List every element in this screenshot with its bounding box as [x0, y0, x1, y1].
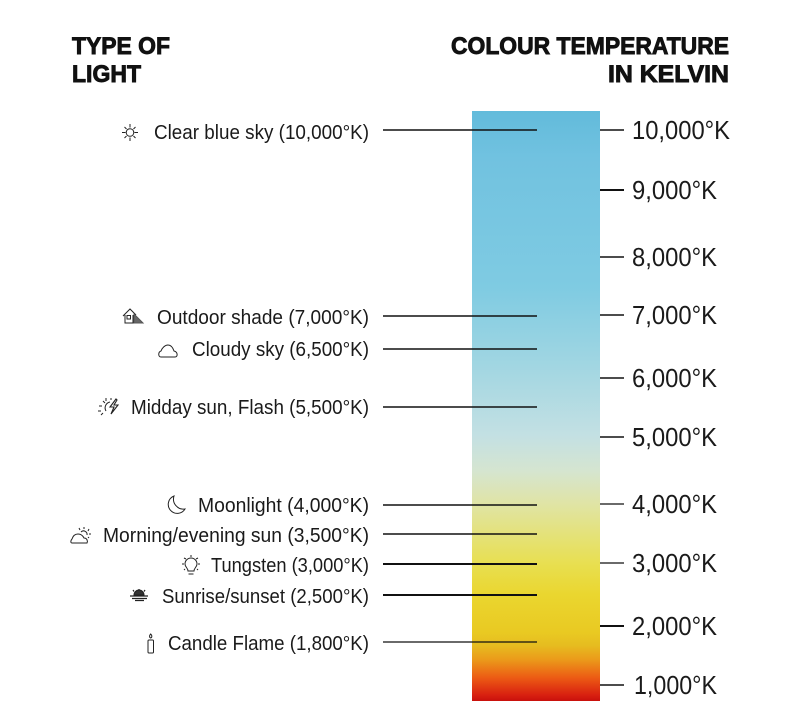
colour temperature gradient bar — [472, 111, 600, 701]
icon: crescent moon — [168, 496, 185, 513]
icon: sun on horizon — [130, 589, 148, 600]
light type: cloudy sky — [159, 339, 537, 361]
light type: candle flame: Candle Flame (1,800°K) — [168, 633, 369, 655]
icon: sun — [122, 124, 138, 141]
icon: light bulb — [182, 555, 200, 574]
scale mark: 8,000K — [600, 244, 717, 272]
icon: cloud — [159, 345, 177, 357]
scale mark: 9,000K: 9,000°K — [632, 177, 717, 205]
icon: house in shade — [123, 309, 143, 323]
kelvin scale — [600, 117, 730, 700]
light type: tungsten — [182, 555, 537, 577]
light type: cloudy sky: Cloudy sky (6,500°K) — [192, 339, 369, 361]
scale mark: 2,000K — [600, 613, 717, 641]
light type: sunrise/sunset: Sunrise/sunset (2,500°K) — [162, 586, 369, 608]
heading: type of light: TYPE OF — [72, 33, 170, 60]
scale mark: 9,000K — [600, 177, 717, 205]
scale mark: 8,000K: 8,000°K — [632, 244, 717, 272]
light type: outdoor shade — [123, 307, 537, 329]
heading: colour temperature in kelvin — [451, 33, 729, 88]
heading: type of light — [72, 33, 170, 88]
scale mark: 3,000K — [600, 550, 717, 578]
light type: tungsten: Tungsten (3,000°K) — [211, 555, 369, 577]
scale mark: 6,000K — [600, 365, 717, 393]
icon: sun behind cloud — [71, 527, 91, 543]
icon: candle — [148, 634, 154, 653]
scale mark: 1,000K: 1,000°K — [634, 672, 717, 700]
light type: candle flame — [148, 633, 537, 655]
scale mark: 3,000K: 3,000°K — [632, 550, 717, 578]
scale mark: 1,000K — [600, 672, 717, 700]
light type: moonlight — [168, 495, 537, 517]
scale mark: 2,000K: 2,000°K — [632, 613, 717, 641]
light type: midday sun, flash — [98, 397, 537, 419]
scale mark: 10,000K: 10,000°K — [632, 117, 730, 145]
heading: colour temperature in kelvin: COLOUR TEMPERATURE — [451, 33, 729, 60]
scale mark: 4,000K — [600, 491, 717, 519]
scale mark: 5,000K — [600, 424, 717, 452]
light type: sunrise/sunset — [130, 586, 537, 608]
light type: morning/evening sun — [71, 525, 537, 547]
heading: type of light: LIGHT — [72, 61, 141, 88]
light type: clear blue sky: Clear blue sky (10,000°K) — [154, 122, 369, 144]
scale mark: 7,000K — [600, 302, 717, 330]
scale mark: 4,000K: 4,000°K — [632, 491, 717, 519]
light type: outdoor shade: Outdoor shade (7,000°K) — [157, 307, 369, 329]
light type: midday sun, flash: Midday sun, Flash (5,500°K) — [131, 397, 369, 419]
scale mark: 7,000K: 7,000°K — [632, 302, 717, 330]
icon: sun with lightning flash — [98, 398, 118, 415]
light type: clear blue sky — [122, 122, 537, 144]
light type: moonlight: Moonlight (4,000°K) — [198, 495, 369, 517]
heading: colour temperature in kelvin: IN KELVIN — [608, 61, 729, 88]
scale mark: 6,000K: 6,000°K — [632, 365, 717, 393]
light type: morning/evening sun: Morning/evening sun (3,500°K) — [103, 525, 369, 547]
scale mark: 5,000K: 5,000°K — [632, 424, 717, 452]
